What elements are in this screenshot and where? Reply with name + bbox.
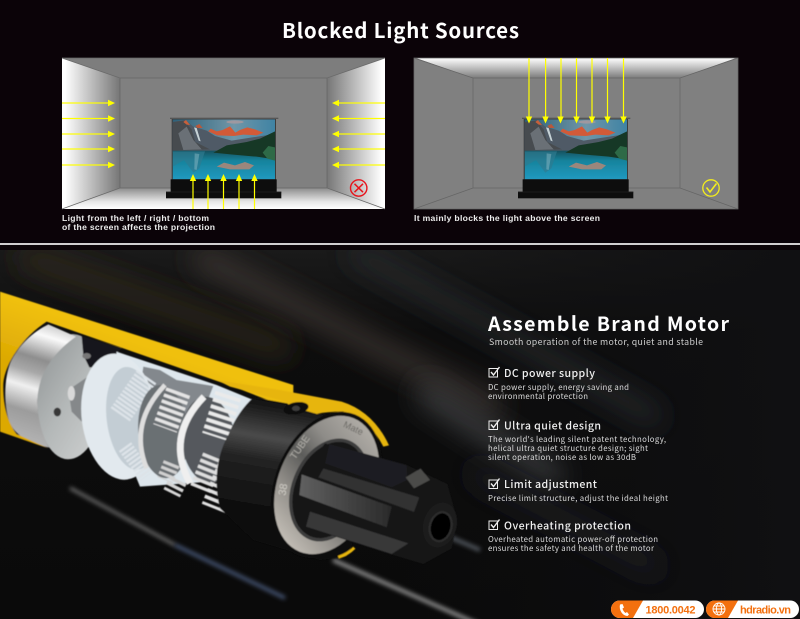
- projector screen with mountain lake image: [518, 118, 633, 198]
- feature: Overheating protection: ensures the safety and health of the motor: [488, 543, 655, 554]
- caption: left diagram: Light from the left / right / bottom: [62, 213, 209, 223]
- icon: red cross: [350, 180, 367, 196]
- icon: checkbox: [489, 520, 500, 530]
- motor: front ring: TUBE: [288, 433, 313, 462]
- motor: front ring: 38: [276, 483, 290, 497]
- motor: interior housing: [110, 352, 253, 487]
- badge: website: [706, 600, 799, 618]
- caption: left diagram: [62, 213, 215, 232]
- motor: screw recess: [282, 400, 310, 416]
- feature: Limit adjustment: Precise limit structure, adjust the ideal height: [488, 493, 668, 504]
- panel: light from sides and bottom (wrong): [62, 58, 385, 232]
- feature: Overheating protection: Overheating protection: [504, 518, 631, 534]
- room: left diagram walls: [62, 58, 385, 209]
- divider line: [0, 243, 800, 245]
- icon: yellow check: [703, 180, 719, 196]
- feature: DC power supply: environmental protection: [488, 391, 588, 402]
- motor: yellow tube: [0, 292, 293, 448]
- arrows: light from right: [332, 100, 385, 168]
- motor: dark bracket: [82, 336, 122, 367]
- motor: front ring: Mate: [342, 419, 365, 437]
- arrows: light from bottom: [190, 174, 258, 209]
- motor: output shaft: [299, 443, 462, 564]
- panel: light from above blocked (correct): [414, 58, 738, 223]
- icon: checkbox: [489, 420, 500, 430]
- panel: motor section background: [0, 250, 800, 619]
- title: Blocked Light Sources: Blocked Light Sources: [282, 14, 519, 44]
- motor: black collar: [217, 397, 380, 560]
- feature: Ultra quiet design: helical ultra quiet structure design; sight: [488, 443, 648, 454]
- feature: DC power supply: [488, 366, 629, 402]
- feature: DC power supply: DC power supply: [504, 366, 595, 381]
- feature: Ultra quiet design: The world's leading silent patent technology,: [488, 434, 666, 445]
- icon: phone: [620, 604, 629, 616]
- feature: Ultra quiet design: silent operation, noise as low as 30dB: [488, 452, 636, 463]
- motor: white plastic gear: [74, 349, 164, 484]
- icon: checkbox: [489, 478, 500, 488]
- feature: Overheating protection: [488, 518, 658, 554]
- room: right diagram walls: [414, 58, 738, 209]
- icon: checkbox: [489, 367, 500, 377]
- feature: Limit adjustment: Limit adjustment: [504, 477, 598, 492]
- motor: planetary gears: [134, 383, 239, 490]
- icon: globe: [713, 603, 725, 615]
- arrows: light from above: [526, 58, 627, 124]
- badge: phone number: [611, 600, 704, 618]
- arrows: light from left: [62, 100, 115, 168]
- motor: shaft: [68, 368, 100, 422]
- caption: left diagram: of the screen affects the projection: [62, 222, 215, 232]
- projector screen with mountain lake image: [166, 118, 281, 198]
- feature: Ultra quiet design: Ultra quiet design: [504, 418, 601, 434]
- badge: phone number: 1800.0042: [646, 604, 696, 616]
- caption: right diagram: It mainly blocks the light above the screen: [414, 213, 600, 223]
- motor: front half: [217, 380, 462, 575]
- subheading: Smooth operation of the motor, quiet and stable: [489, 335, 703, 348]
- badge: website: hdradio.vn: [740, 604, 791, 616]
- top panel background: [0, 0, 800, 243]
- motor: silver bearing ring: [5, 324, 76, 448]
- feature: DC power supply: DC power supply, energy saving and: [488, 382, 629, 393]
- feature: Ultra quiet design: [488, 418, 666, 463]
- feature: Limit adjustment: [488, 477, 668, 504]
- motor: grey end disc: [34, 332, 107, 461]
- motor: rear half: [0, 292, 293, 508]
- motor illustration: [0, 292, 462, 575]
- motor: yellow strip and lip: [217, 380, 389, 447]
- motor: small hole: [54, 408, 61, 416]
- motor: front ring: [250, 395, 403, 575]
- feature: Overheating protection: Overheated automatic power-off protection: [488, 534, 658, 545]
- heading: Assemble Brand Motor: Assemble Brand Motor: [487, 308, 729, 337]
- motor: lower gear teeth: [172, 467, 230, 508]
